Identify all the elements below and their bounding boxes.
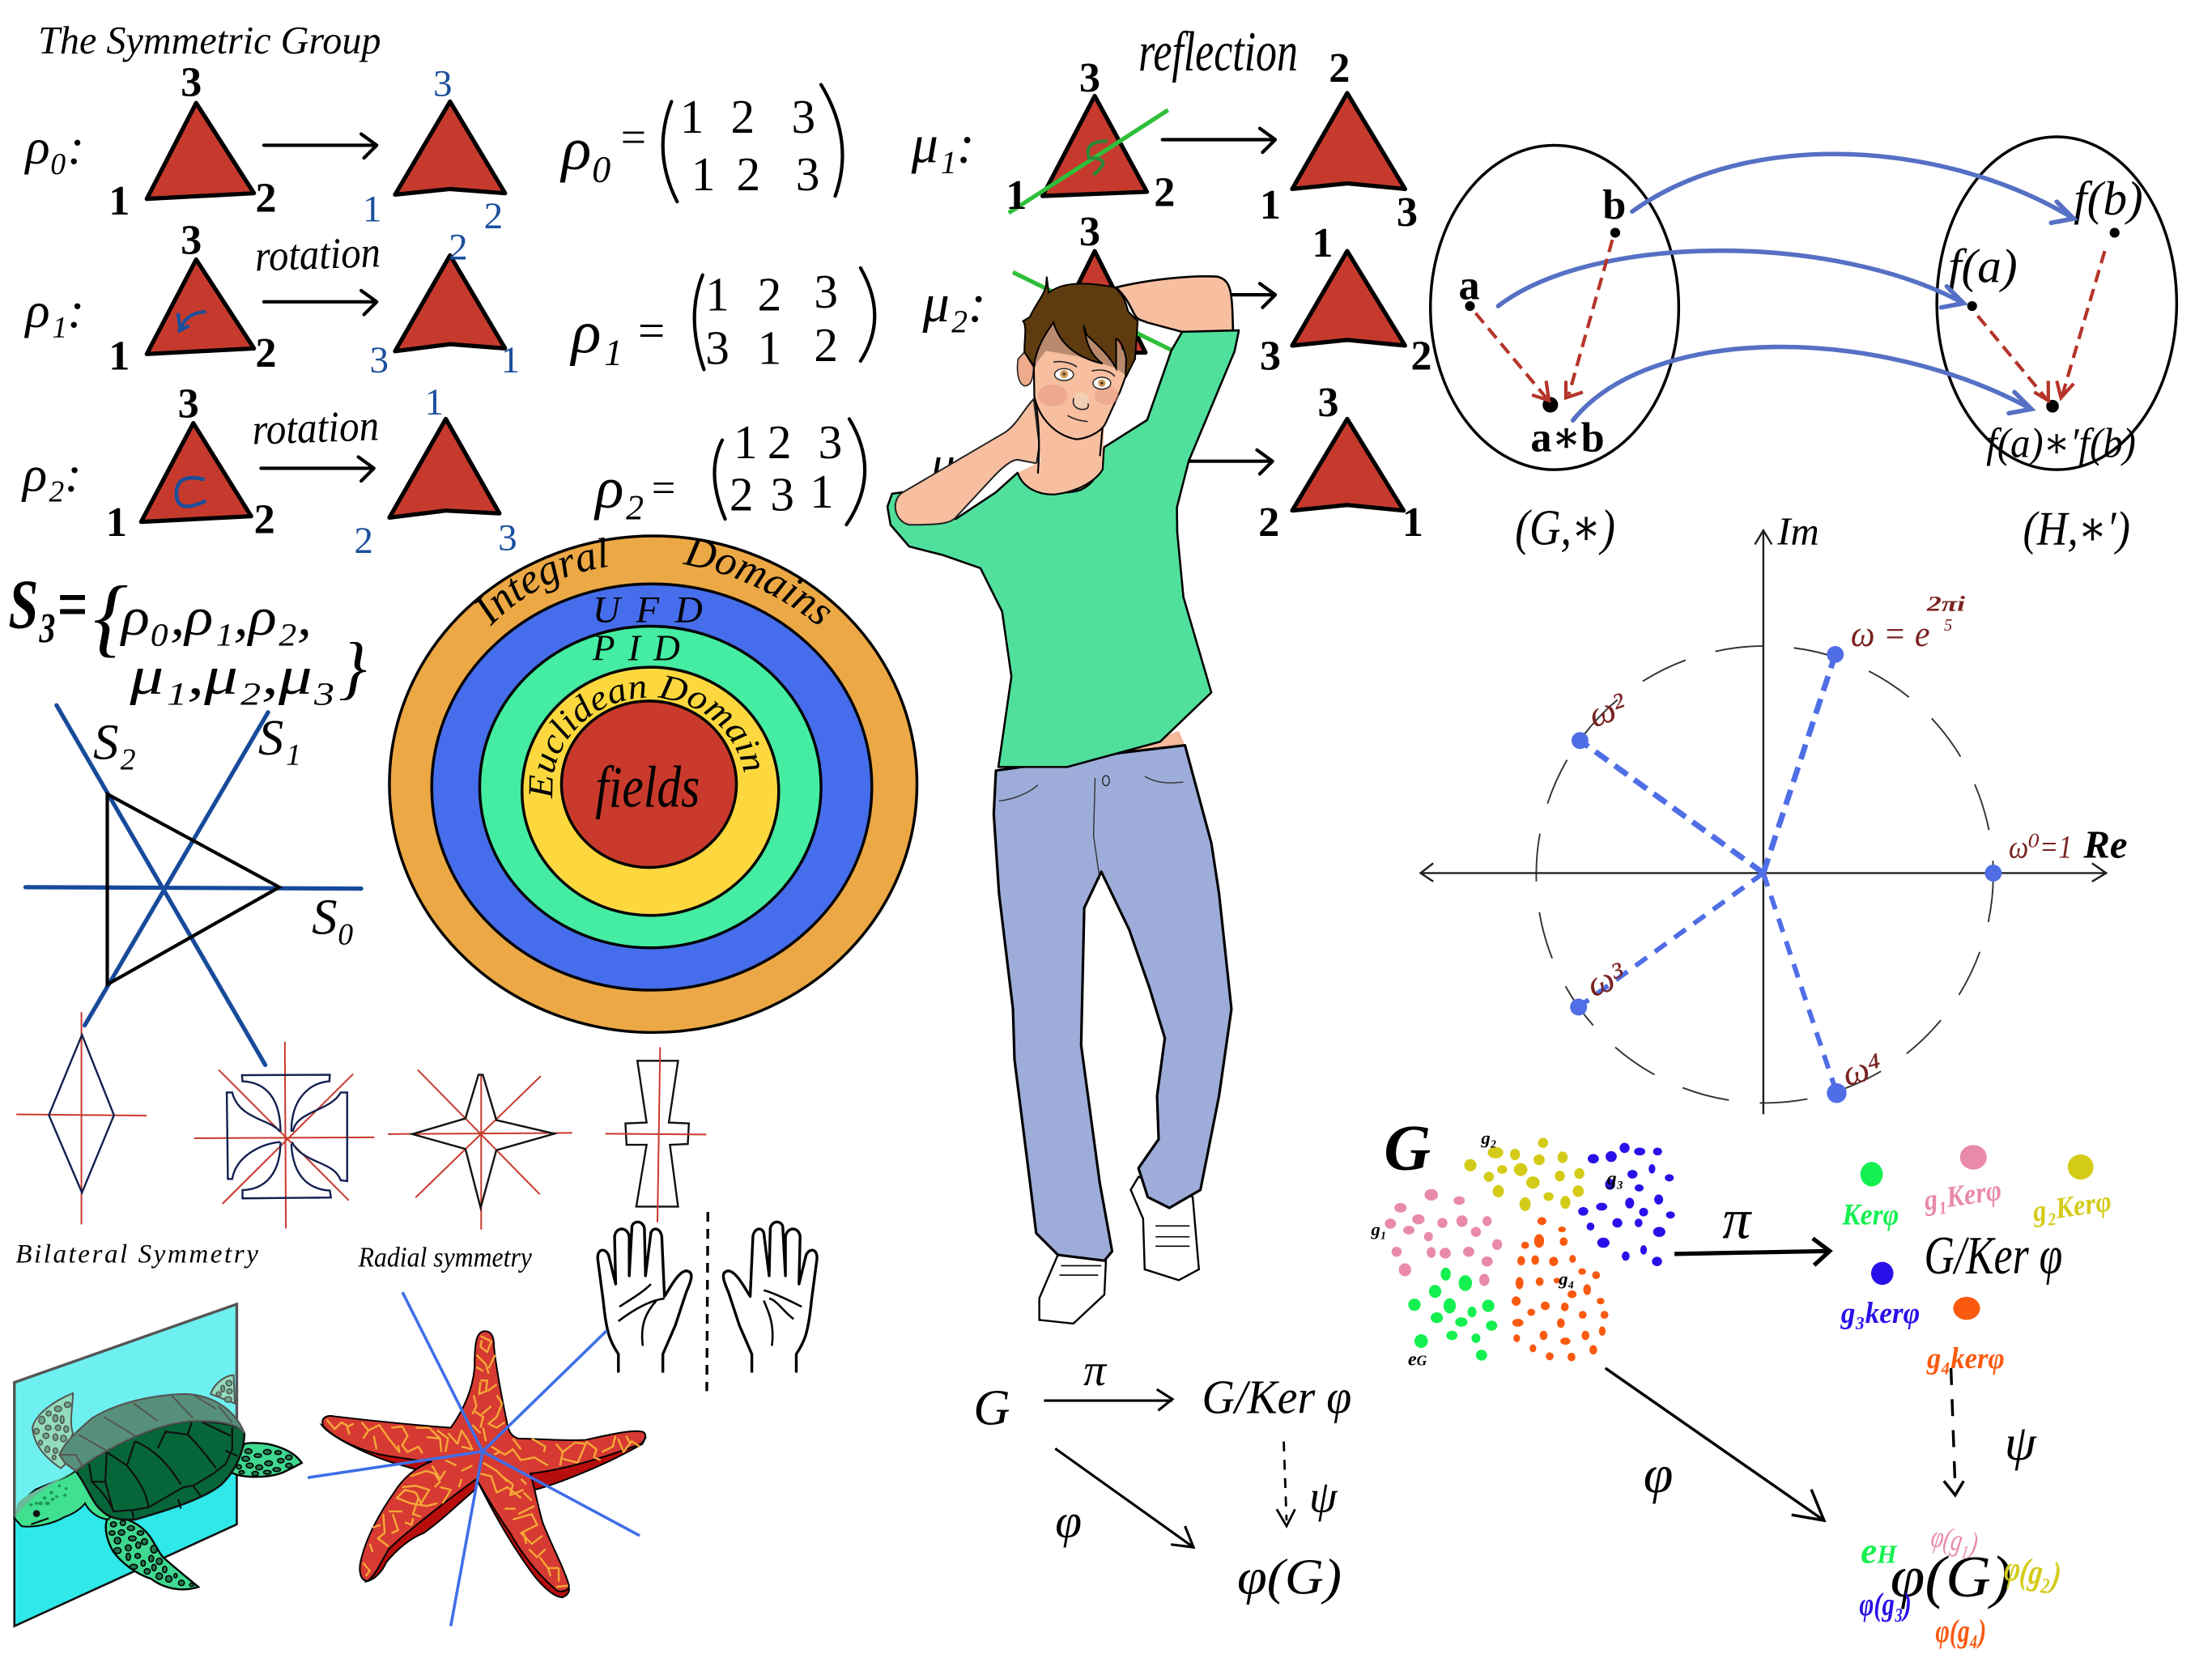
maps phi and psi (1606, 1368, 2037, 1520)
reflected flippers (32, 1375, 235, 1469)
panel: reflection mu3: 3 (1317, 379, 1338, 426)
quotient diagram small (973, 1346, 1351, 1605)
matrix rho2: ρ₂ (593, 455, 644, 521)
root labels: ω⁰=1 (2009, 828, 2072, 865)
rings of algebraic domains: PID (592, 627, 680, 668)
waist skin (1123, 731, 1186, 753)
set H: (H,∗′) (2023, 502, 2130, 555)
quotient diagram small: ψ (1309, 1473, 1338, 1523)
panel: reflection mu1 (911, 21, 1418, 236)
panel: reflection mu3: 2 (1258, 499, 1279, 546)
rings of algebraic domains: Domains (683, 541, 831, 624)
quotient diagram small: φ (1055, 1494, 1082, 1548)
hair (1023, 277, 1138, 378)
matrix rho2: = (649, 465, 678, 512)
triangle symmetry axes: S₂ (93, 713, 136, 770)
matrix rho2: 1 (734, 415, 758, 469)
panel: rotation rho2: 3 (498, 517, 517, 559)
icon: right hand (723, 1222, 817, 1373)
panel: reflection mu3: 1 (1402, 499, 1423, 546)
panel: reflection mu2: 3 (1260, 332, 1281, 379)
panel: rotation rho1: 1 (501, 339, 520, 381)
neck (1018, 399, 1104, 495)
matrix rho0: = (618, 113, 649, 163)
panel: reflection mu1: reflection (1138, 21, 1298, 83)
panel: reflection mu1: 1 (1260, 181, 1281, 228)
panel: rotation rho2: rotation (251, 401, 380, 454)
panel: reflection mu1: 1 (1006, 172, 1027, 219)
set definition S3: μ₁,μ₂,μ₃ (129, 647, 336, 706)
matrix rho2: 3 (819, 415, 842, 469)
panel: reflection mu2: μ₂: (922, 274, 986, 334)
image labels: φ(g₃) (1859, 1586, 1912, 1622)
label: radial symmetry: Radial symmetry (358, 1242, 532, 1273)
group labels: g₃ (1606, 1167, 1623, 1189)
panel: rotation rho2: 2 (354, 520, 373, 562)
image labels (1859, 1520, 2064, 1649)
large quotient dots (1861, 1145, 2094, 1320)
matrix rho1: 2 (814, 318, 838, 372)
group labels: G (1384, 1112, 1431, 1184)
rings of algebraic domains: Integral (474, 538, 608, 627)
complex plane axes: Im (1776, 510, 1819, 554)
panel: rotation rho1: 3 (370, 339, 389, 381)
jeans (993, 746, 1231, 1261)
panel: rotation rho1 (23, 217, 520, 381)
group labels: eG (1408, 1348, 1427, 1370)
set H: f(a)∗′f(b) (1986, 419, 2136, 466)
root labels: ω³ (1581, 954, 1631, 1005)
matrix rho0: 2 (737, 147, 760, 201)
lower arm (895, 399, 1040, 525)
quotient labels: g₁Kerφ (1921, 1173, 2003, 1217)
panel: rotation rho0: 2 (255, 174, 277, 221)
set H: f(a) (1948, 239, 2018, 292)
panel: reflection mu3: μ₃: (930, 436, 988, 490)
face (1034, 321, 1135, 440)
panel: rotation rho2: 2 (254, 496, 275, 543)
orange coset (1512, 1217, 1608, 1362)
rings of algebraic domains: fields (595, 755, 700, 820)
projection arrow pi: π (1722, 1189, 1752, 1252)
set definition S3: ρ₀,ρ₁,ρ₂, (120, 588, 312, 647)
panel: reflection mu2 (922, 208, 1431, 379)
starfish body (321, 1331, 645, 1597)
complex plane axes (1421, 510, 2128, 1114)
quotient labels (1840, 1173, 2113, 1375)
panel: reflection mu1: 3 (1079, 54, 1100, 101)
figure: rhombus (16, 1012, 147, 1224)
panel: reflection mu1: 3 (1397, 189, 1418, 236)
set definition S3: } (338, 628, 367, 707)
panel: reflection mu1: 2 (1154, 168, 1175, 215)
panel: rotation rho1: 2 (255, 329, 277, 376)
quotient diagram small: φ(G) (1237, 1549, 1342, 1605)
panel: rotation rho2: 1 (106, 499, 127, 546)
panel: rotation rho1: ρ₁: (23, 282, 84, 338)
panel: rotation rho1: 3 (181, 217, 202, 264)
person figure (887, 276, 1239, 1324)
rings of algebraic domains: Euclidean Domain (530, 675, 759, 799)
quotient diagram small: G (973, 1380, 1010, 1436)
mirror plane (15, 1304, 236, 1626)
rings of algebraic domains: UFD (593, 589, 703, 631)
image labels: eH (1861, 1530, 1898, 1571)
image labels: φ(g₂) (2002, 1548, 2064, 1596)
root labels: ω⁴ (1838, 1045, 1886, 1094)
title: The Symmetric Group (38, 19, 381, 62)
group labels (1371, 1112, 1623, 1370)
matrix rho0: 1 (680, 90, 704, 143)
panel: rotation rho0: 1 (363, 189, 381, 231)
panel: rotation rho0: 2 (484, 195, 503, 237)
panel: rotation rho0: ρ₀: (23, 118, 84, 175)
panel: rotation rho0: 1 (108, 177, 130, 224)
panel: rotation rho1: 1 (108, 332, 130, 379)
root labels: ω = e (1851, 614, 1929, 654)
matrix rho0: 2 (731, 90, 755, 143)
rings of algebraic domains (388, 534, 918, 1034)
root labels (1581, 592, 2072, 1094)
group labels: g₄ (1558, 1269, 1574, 1289)
matrix rho0: 1 (691, 147, 715, 201)
coset dots for group G (1385, 1137, 2094, 1362)
matrix rho1 (570, 265, 874, 374)
starfish with radial axes (308, 1292, 645, 1626)
matrix rho1: 1 (705, 267, 730, 321)
body and clothing (887, 330, 1239, 1324)
turtle with mirror (15, 1304, 302, 1626)
panel: rotation rho1: rotation (254, 227, 381, 281)
hands with mirror line (598, 1212, 817, 1391)
matrix rho2: 2 (768, 415, 791, 469)
panel: rotation rho0: 3 (181, 58, 202, 105)
image labels: φ(g₁) (1929, 1520, 1980, 1561)
shoes (1040, 1177, 1199, 1324)
panel: rotation rho0 (23, 58, 505, 237)
root labels: 5 (1944, 615, 1952, 635)
t-shirt (887, 330, 1239, 767)
quotient labels: g₃kerφ (1840, 1296, 1920, 1329)
matrix rho0: 3 (796, 147, 819, 201)
quotient diagram small: π (1083, 1346, 1108, 1396)
figure: four point star (388, 1069, 572, 1230)
matrix rho2: 3 (770, 468, 794, 521)
panel: rotation rho2: ρ₂: (21, 445, 82, 502)
matrix rho0: ρ₀ (559, 114, 613, 183)
matrix rho2: 1 (810, 465, 834, 518)
set G: (G,∗) (1515, 500, 1615, 556)
root labels: 2πi (1926, 592, 1966, 615)
matrix rho1: 3 (814, 265, 838, 318)
roots of unity diagram (1421, 510, 2128, 1114)
projection arrow pi (1674, 1189, 1830, 1265)
homomorphism diagram (1431, 137, 2176, 556)
panel: reflection mu3 (930, 379, 1423, 546)
figure: curved cross (194, 1042, 374, 1228)
shell (59, 1394, 245, 1520)
root spokes and points (1570, 646, 2001, 1103)
set G: a (1459, 261, 1480, 308)
triangle symmetry axes: S₁ (258, 709, 301, 766)
quotient labels: G/Ker φ (1924, 1226, 2062, 1286)
matrix rho1: 3 (705, 321, 730, 374)
flippers and head (15, 1443, 302, 1589)
matrix rho1: = (635, 304, 667, 358)
group labels: g₂ (1480, 1128, 1497, 1148)
panel: reflection mu2: 1 (1312, 219, 1333, 266)
maps phi and psi: φ (1644, 1445, 1673, 1504)
maps phi and psi: ψ (2005, 1414, 2037, 1471)
set definition S3: S₃= (9, 564, 87, 643)
image labels: φ(g₄) (1935, 1613, 1986, 1649)
panel: rotation rho1: 2 (449, 227, 468, 269)
triangle symmetry axes (25, 705, 361, 1065)
image labels: φ(G) (1891, 1544, 2012, 1609)
panel: rotation rho2: 1 (424, 381, 444, 423)
matrix rho0 (559, 85, 842, 202)
pink coset (1385, 1189, 1502, 1286)
group labels: g₁ (1371, 1219, 1387, 1239)
matrix rho1: 1 (758, 321, 781, 374)
unit circle (1536, 646, 1993, 1103)
root labels: ω² (1583, 684, 1632, 735)
set G: b (1602, 181, 1626, 228)
set H (1937, 137, 2176, 555)
set G (1431, 145, 1678, 556)
set G: a∗b (1530, 414, 1605, 461)
panel: reflection mu2: 3 (1079, 208, 1100, 255)
matrix rho2 (593, 415, 865, 525)
symmetric figures: bilateral and radial (16, 1012, 706, 1230)
matrix rho2: 2 (730, 468, 753, 521)
label: bilateral symmetry: Bilateral Symmetry (15, 1239, 258, 1269)
panel: rotation rho2: 3 (178, 380, 199, 427)
icon: left hand (598, 1222, 691, 1373)
head and neck (1018, 277, 1138, 495)
triangle symmetry axes: S₀ (312, 888, 355, 945)
quotient labels: g₂Kerφ (2030, 1184, 2113, 1228)
panel: reflection mu1: μ₁: (911, 115, 975, 174)
complex plane axes: Re (2082, 823, 2128, 866)
set H: f(b) (2074, 172, 2143, 225)
matrix rho1: 2 (758, 267, 781, 321)
quotient diagram small: G/Ker φ (1202, 1371, 1351, 1424)
quotient labels: Kerφ (1842, 1197, 1899, 1231)
green coset (1408, 1268, 1497, 1361)
panel: reflection mu1: 2 (1329, 45, 1350, 91)
radial symmetry axes (308, 1292, 640, 1626)
yellow coset (1464, 1137, 1585, 1211)
raised arm behind shirt (1117, 276, 1233, 332)
matrix rho1: ρ₁ (570, 298, 623, 367)
blue coset (1578, 1143, 1675, 1266)
ear (1018, 352, 1034, 386)
set definition S3 (9, 564, 367, 707)
panel: rotation rho2 (21, 380, 517, 562)
mapping arrows (1475, 154, 2105, 420)
quotient labels: g₄kerφ (1926, 1341, 2005, 1375)
matrix rho0: 3 (791, 90, 815, 143)
panel: reflection mu2: 2 (1410, 332, 1431, 379)
figure: cross (606, 1047, 706, 1222)
panel: rotation rho0: 3 (433, 62, 452, 104)
set definition S3: { (93, 569, 128, 665)
